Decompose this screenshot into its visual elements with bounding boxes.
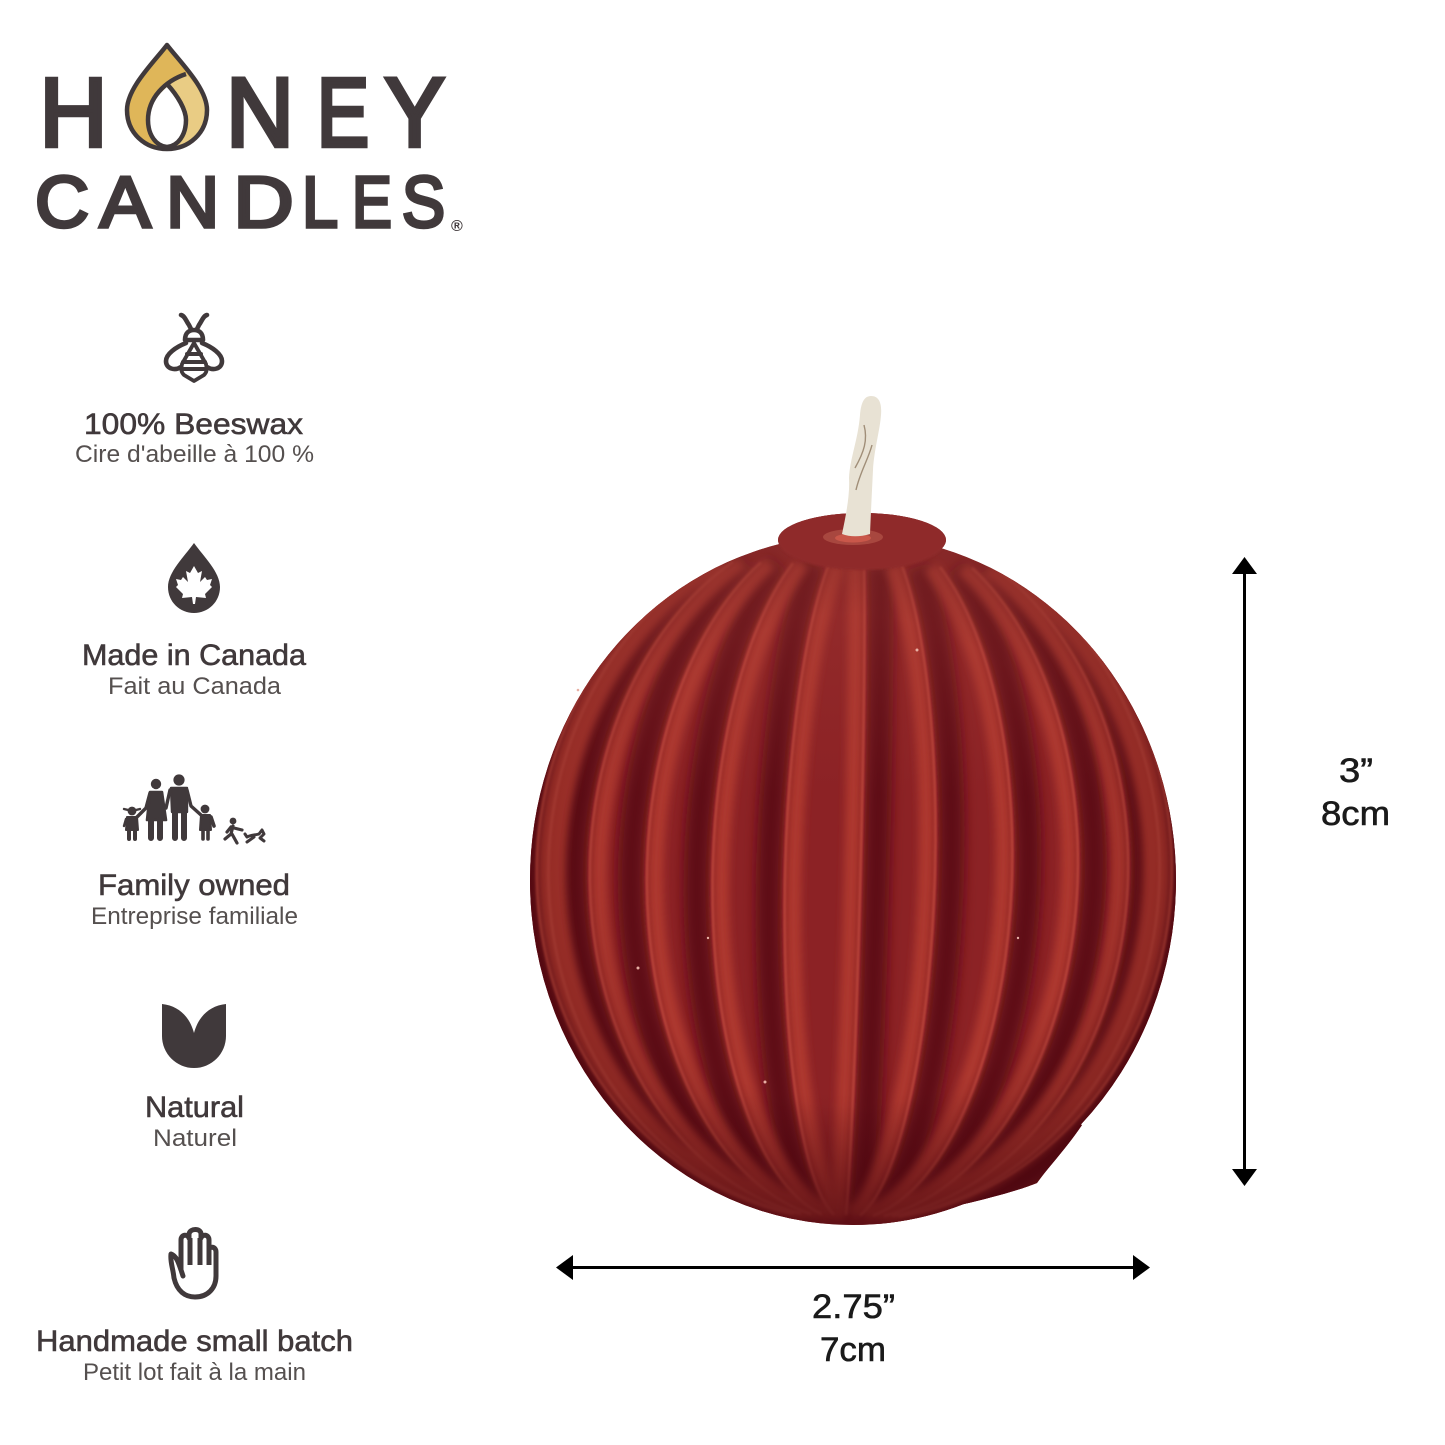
candle top cap [778, 510, 946, 570]
heading: Natural [145, 1091, 244, 1124]
feature: 100% Beeswax [75, 315, 314, 468]
logo wordmark: CANDLES [35, 162, 445, 244]
icon: family [124, 774, 264, 843]
French subtitle: Fait au Canada [108, 673, 282, 700]
logo wordmark: HONEY: N [226, 60, 294, 167]
logo wordmark: CANDLES: D [233, 162, 294, 243]
French subtitle: Entreprise familiale [91, 903, 298, 930]
feature: Handmade small batch [36, 1230, 353, 1386]
heading: 100% Beeswax [84, 408, 303, 441]
label: height 3 inch / 8cm [1321, 752, 1390, 833]
icon: tulip leaf [162, 1004, 226, 1068]
wick [842, 396, 881, 536]
feature: Made in Canada [82, 543, 306, 700]
French subtitle: Petit lot fait à la main [83, 1359, 306, 1386]
feature: Family owned [91, 774, 298, 930]
label: width 2.75 inch / 7cm [812, 1288, 895, 1369]
logo flame icon [127, 45, 207, 149]
logo wordmark: CANDLES: C [35, 163, 89, 243]
logo wordmark: CANDLES: N [166, 163, 219, 243]
logo: Honey Candles [35, 45, 463, 244]
label: height 3 inch / 8cm: 8cm [1321, 795, 1390, 833]
icon: drop with maple leaf [168, 543, 220, 613]
registered mark: ® [451, 218, 463, 235]
icon: hand [171, 1230, 216, 1297]
heading: Made in Canada [82, 639, 306, 672]
logo wordmark: CANDLES: E [352, 163, 392, 244]
feature: Natural [145, 1004, 244, 1152]
heading: Family owned [98, 869, 290, 902]
logo wordmark: HONEY: Y [385, 58, 445, 167]
logo wordmark: CANDLES: S [402, 162, 445, 243]
arrow: height dimension [1232, 557, 1257, 1186]
French subtitle: Naturel [153, 1125, 237, 1152]
logo wordmark: HONEY: H [40, 60, 107, 167]
logo wordmark: HONEY: E [317, 58, 369, 167]
label: width 2.75 inch / 7cm: 7cm [820, 1331, 886, 1369]
label: width 2.75 inch / 7cm: 2.75” [812, 1288, 895, 1326]
wax specks [577, 648, 1019, 1084]
candle: ribbed red beeswax sphere [512, 396, 1196, 1240]
French subtitle: Cire d'abeille à 100 % [75, 441, 314, 468]
heading: Handmade small batch [36, 1325, 353, 1358]
logo wordmark: HONEY [40, 58, 445, 167]
logo wordmark: CANDLES: A [100, 162, 151, 243]
logo wordmark: CANDLES: L [302, 162, 338, 243]
label: height 3 inch / 8cm: 3” [1339, 752, 1373, 790]
arrow: width dimension [556, 1255, 1150, 1280]
candle body [512, 500, 1196, 1240]
icon: bee [166, 315, 222, 381]
